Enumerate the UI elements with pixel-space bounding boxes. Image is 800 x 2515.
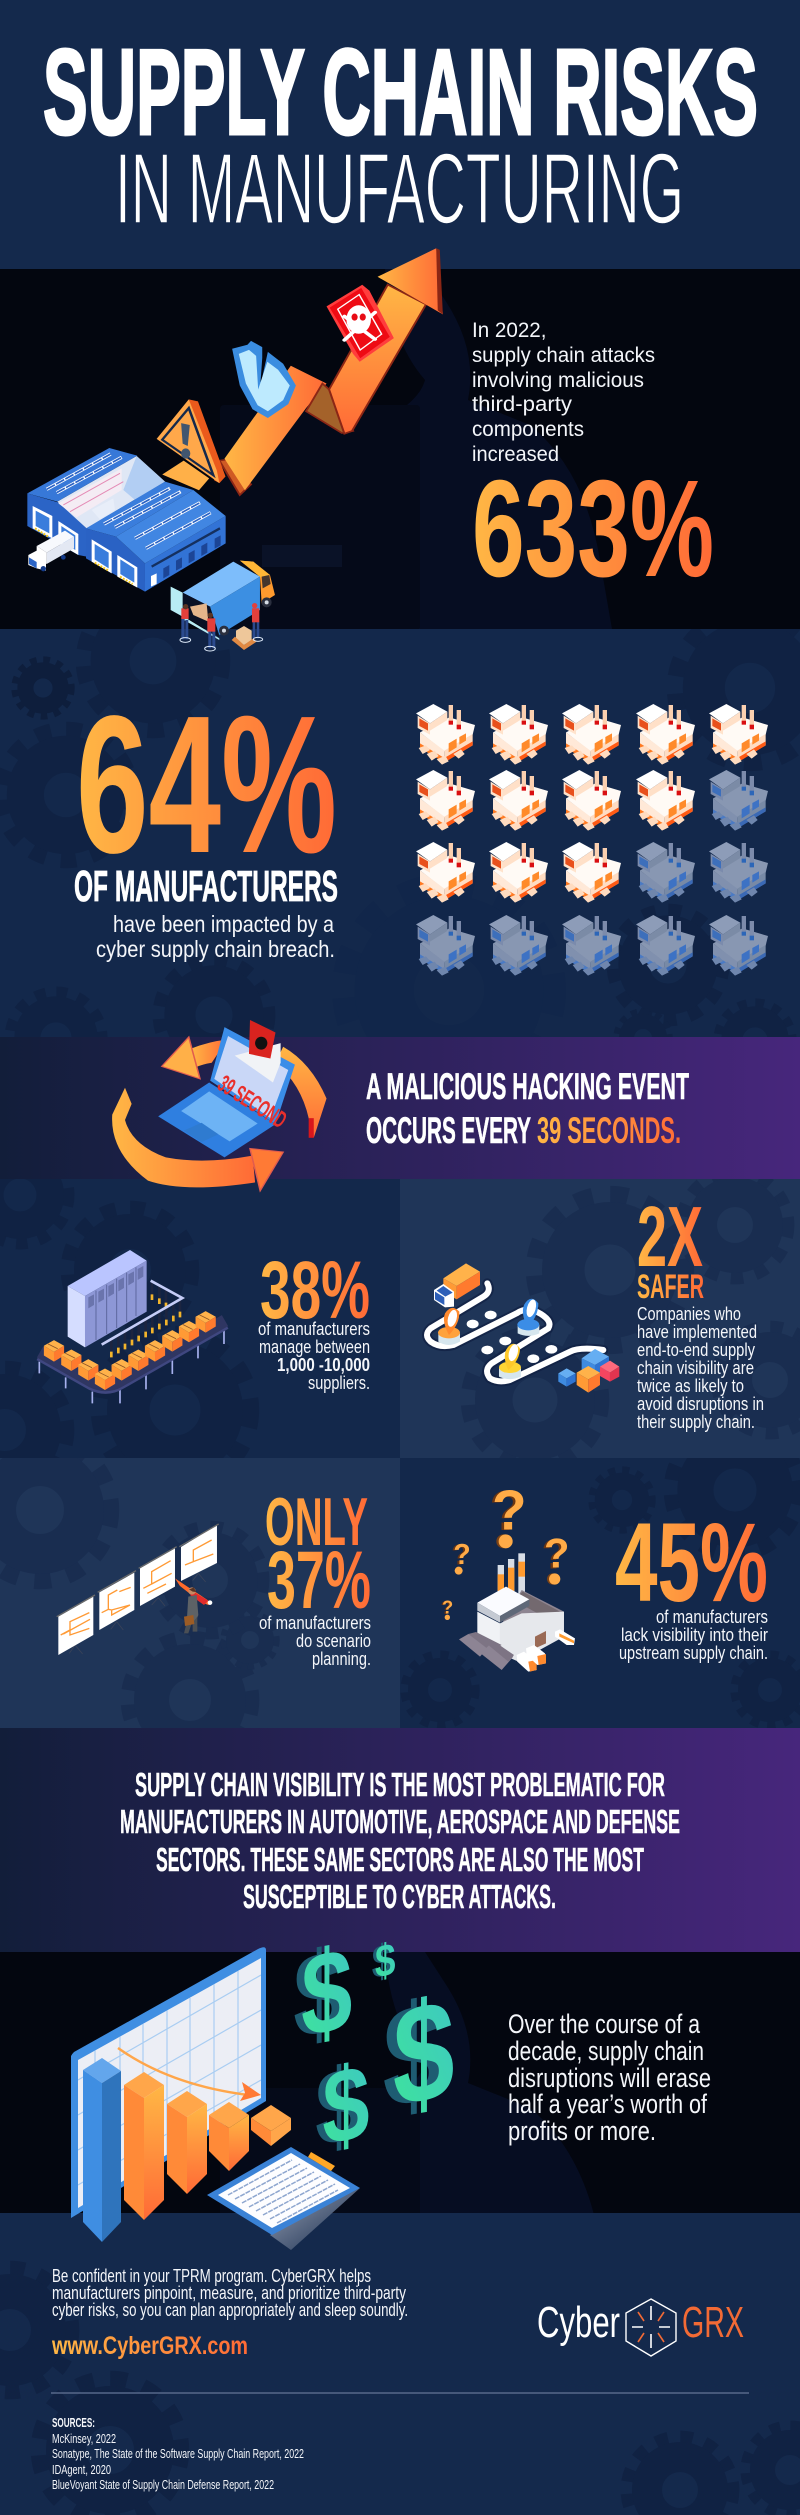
text block: 37 percent detail: planning. <box>312 1649 371 1669</box>
text block: profits: decade, supply chain <box>508 2036 704 2066</box>
icon: factory with question marks: ? <box>451 1539 469 1571</box>
pictogram: factories 12 of 20 impacted <box>416 704 768 976</box>
text block: 45 percent detail: upstream supply chain. <box>619 1643 768 1663</box>
icon: factory with question marks <box>441 1479 575 1672</box>
text block: sources: IDAgent, 2020 <box>52 2463 111 2477</box>
icon: factory with question marks: ? <box>544 1530 569 1577</box>
panel: purple visibility band background <box>0 1728 800 1952</box>
icon: laptop with circular arrows <box>112 1020 327 1191</box>
text block: call to action <box>52 2266 408 2320</box>
text block: 45 percent detail <box>619 1607 768 1663</box>
text block: 633 percent lead-in: third-party <box>472 393 573 416</box>
text block: profits: profits or more. <box>508 2116 656 2146</box>
heading: hacking event: OCCURS EVERY <box>366 1110 531 1151</box>
text block: profits: Over the course of a <box>508 2009 701 2039</box>
arrow: rising attack arrow <box>162 248 443 495</box>
text block: 2X detail: avoid disruptions in <box>637 1394 764 1414</box>
logo: CyberGRX <box>537 2298 744 2356</box>
heading: supply chain visibility statement <box>120 1766 680 1915</box>
text block: impacted: cyber supply chain breach. <box>96 936 335 962</box>
icon: factory with question marks: ? <box>442 1597 453 1618</box>
stat: only 37 percent: ONLY <box>265 1484 368 1560</box>
text block: 2X detail: have implemented <box>637 1322 757 1342</box>
text block: 2X detail: chain visibility are <box>637 1358 754 1378</box>
icon: factory with question marks: ? <box>489 1480 524 1543</box>
text block: call to action: Be confident in your TPRM program. CyberGRX helps <box>52 2266 371 2286</box>
panel: header background <box>0 0 800 269</box>
text block: profits: half a year’s worth of <box>508 2089 707 2119</box>
text block: 45 percent detail: lack visibility into their <box>621 1625 768 1645</box>
text block: 633 percent lead-in: increased <box>472 443 559 466</box>
text block: 633 percent lead-in: supply chain attacks <box>472 344 655 367</box>
icon: delivery route <box>427 1263 619 1393</box>
icon: factory with question marks: ? <box>542 1530 567 1577</box>
icon: scenario planning boards <box>57 1524 219 1655</box>
stat: only 37 percent: 37% <box>267 1535 371 1626</box>
icon: warning triangle <box>157 399 226 483</box>
text block: impacted: have been impacted by a <box>113 911 334 937</box>
icon: factory with question marks: ? <box>492 1479 527 1542</box>
heading: of manufacturers: OF MANUFACTURERS <box>74 862 338 911</box>
heading: hacking event <box>366 1066 689 1151</box>
text block: 633 percent lead-in: involving malicious <box>472 369 644 392</box>
text block: 37 percent detail: do scenario <box>296 1631 371 1651</box>
icon: warehouse <box>27 448 275 651</box>
text block: call to action: cyber risks, so you can plan appropriately and sleep soundly. <box>52 2300 408 2320</box>
panel: 45 percent background <box>404 1458 800 1728</box>
icon: factory with question marks: ? <box>453 1539 471 1571</box>
text block: 38 percent detail: of manufacturers <box>258 1319 370 1339</box>
logo: CyberGRX: Cyber <box>537 2298 620 2347</box>
stat: 38 percent: 38% <box>260 1245 370 1336</box>
stat: 2X safer: 2X <box>637 1190 703 1285</box>
icon: factory with question marks: ? <box>441 1597 452 1618</box>
text block: sources: BlueVoyant State of Supply Chain Defense Report, 2022 <box>52 2478 274 2492</box>
icon: dollar signs: $ <box>393 1969 454 2138</box>
panel: black profits background <box>0 1952 800 2213</box>
text block: 38 percent detail: manage between <box>259 1337 370 1357</box>
panel: footer background <box>6 2264 800 2515</box>
text block: 37 percent detail: of manufacturers <box>259 1613 371 1633</box>
icon: skull danger sign <box>327 285 394 362</box>
icon: dollar signs: $ <box>375 1933 395 1988</box>
text block: 2X detail: end-to-end supply <box>637 1340 755 1360</box>
title <box>43 24 758 245</box>
text block: 37 percent detail <box>259 1613 371 1669</box>
text block: 38 percent detail <box>258 1319 370 1393</box>
text block: 38 percent detail: 1,000 -10,000 <box>277 1355 370 1375</box>
panel: purple hacking event band background <box>0 1037 800 1179</box>
icon: dollar signs <box>293 1922 454 2170</box>
icon: dollar signs: $ <box>301 1922 352 2063</box>
icon: dollar signs: $ <box>315 2044 362 2170</box>
icon: dollar signs: $ <box>322 2043 370 2169</box>
text block: 633 percent lead-in <box>472 319 655 466</box>
text block: 2X detail: twice as likely to <box>637 1376 744 1396</box>
text block: sources: Sonatype, The State of the Software Supply Chain Report, 2022 <box>52 2447 304 2461</box>
icon: dollar signs: $ <box>293 1923 345 2064</box>
text block: 633 percent lead-in: components <box>472 418 584 441</box>
stat: 2X safer: SAFER <box>637 1268 704 1306</box>
icon: dollar signs: $ <box>372 1933 392 1988</box>
icon: conveyor with lockers <box>39 1250 225 1403</box>
text block: 45 percent detail: of manufacturers <box>656 1607 768 1627</box>
text block: sources <box>52 2416 304 2492</box>
text block: impacted <box>96 911 335 962</box>
stat: 64 percent: 64% <box>76 675 337 894</box>
chart: declining bar chart on board <box>71 1947 360 2250</box>
text block: call to action: manufacturers pinpoint, measure, and prioritize third-party <box>52 2283 406 2303</box>
panel: 2X safer background <box>400 1172 800 1466</box>
icon: dollar signs: $ <box>383 1971 444 2140</box>
panel: black attack background <box>0 269 800 630</box>
text block: 38 percent detail: suppliers. <box>308 1373 370 1393</box>
text block: 2X detail: their supply chain. <box>637 1412 755 1432</box>
text block: profits: disruptions will erase <box>508 2063 711 2093</box>
text block: 633 percent lead-in: In 2022, <box>472 319 546 342</box>
panel: gears background <box>1 629 800 1037</box>
text block: profits <box>508 2009 711 2146</box>
text block: sources: McKinsey, 2022 <box>52 2432 116 2446</box>
text block: 2X detail: Companies who <box>637 1304 741 1324</box>
text block: sources: SOURCES: <box>52 2416 95 2430</box>
icon: laptop with circular arrows: 39 SECOND <box>213 1070 291 1134</box>
panel: 38 percent background <box>0 1179 259 1458</box>
logo: CyberGRX: GRX <box>682 2298 744 2347</box>
icon: broken shield <box>232 341 296 418</box>
heading: hacking event: 39 SECONDS. <box>537 1110 681 1151</box>
stat: only 37 percent <box>265 1484 371 1626</box>
panel: only 37 percent background <box>0 1458 400 1728</box>
link: website: www.CyberGRX.com <box>51 2332 248 2360</box>
stat: 2X safer <box>637 1190 704 1306</box>
text block: 2X detail <box>637 1304 764 1432</box>
